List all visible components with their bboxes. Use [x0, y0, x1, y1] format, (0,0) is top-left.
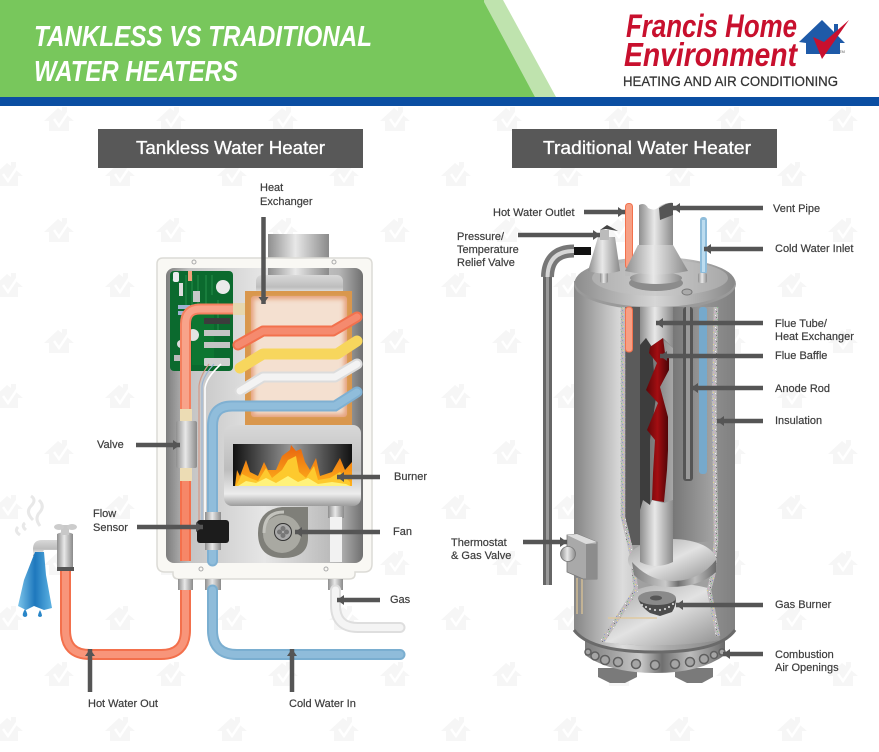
arrow: thermostat	[523, 540, 567, 544]
relief valve	[588, 225, 620, 283]
arrow: cold water in	[290, 649, 294, 692]
pipe: gas out	[336, 590, 400, 628]
side pipe	[543, 247, 591, 585]
label: Pressure/Temperature Relief Valve	[457, 231, 519, 269]
heading: Traditional Water Heater	[512, 129, 777, 168]
label: Gas Burner: Gas Burner	[775, 599, 832, 611]
label: Flue Tube / Heat Exchanger	[775, 318, 854, 343]
flue tube upper	[640, 307, 673, 348]
arrow: flow sensor	[137, 525, 203, 529]
fan	[258, 507, 308, 558]
circuit board	[170, 271, 233, 371]
label: Flow Sensor: Flow	[93, 508, 116, 520]
valve	[176, 409, 197, 481]
title: WATER HEATERS	[34, 56, 239, 88]
label: Flue Tube / Heat Exchanger: Flue Tube/	[775, 318, 828, 330]
pipe: hot water upper	[186, 309, 233, 561]
label: Thermostat & Gas Valve: & Gas Valve	[451, 550, 511, 562]
arrow: cold water inlet	[704, 247, 763, 251]
label: Gas: Gas	[390, 594, 411, 606]
arrow: hot water outlet	[584, 210, 625, 214]
arrow: gas burner	[676, 603, 763, 607]
coil: yellow	[240, 341, 357, 368]
traditional water heater diagram	[543, 203, 736, 683]
flow sensor	[197, 512, 229, 550]
logo: Francis Home Environment: Environment	[624, 36, 799, 73]
label: Pressure/Temperature Relief Valve: Pressure/	[457, 231, 505, 243]
bottom connectors	[178, 579, 343, 590]
logo: Francis Home Environment: TM	[839, 49, 845, 54]
label: Cold Water Inlet: Cold Water Inlet	[775, 243, 853, 255]
logo: Francis Home Environment	[623, 8, 849, 89]
heading: Traditional Water Heater: Traditional Water Heater	[543, 138, 751, 158]
pipe: hot water out	[66, 571, 186, 654]
label: Burner: Burner	[394, 471, 427, 483]
tank body	[574, 257, 736, 652]
arrow: insulation	[717, 419, 763, 423]
arrow: fan	[295, 530, 380, 534]
vent pipe and hood	[625, 203, 688, 291]
tankless water heater diagram	[16, 234, 400, 654]
pipe: cold water upper	[212, 392, 357, 561]
wires	[199, 364, 221, 520]
arrow: relief valve	[518, 233, 600, 237]
label: Flow Sensor	[93, 508, 128, 534]
label: Heat Exchanger: Heat	[260, 182, 283, 194]
label: Flue Baffle: Flue Baffle	[775, 350, 827, 362]
label: Heat Exchanger	[260, 182, 313, 208]
label: Fan: Fan	[393, 526, 412, 538]
coil: red	[238, 317, 357, 345]
thermostat and gas valve	[560, 534, 657, 618]
insulation strips	[602, 307, 718, 642]
label: Valve: Valve	[97, 439, 124, 451]
flue tube lower	[640, 500, 673, 566]
label: Insulation: Insulation	[775, 415, 822, 427]
label: Pressure/Temperature Relief Valve: Temperature	[457, 244, 519, 256]
label: Hot Water Out: Hot Water Out	[88, 698, 158, 710]
connector	[233, 303, 245, 315]
cold water pipe	[698, 217, 707, 474]
flue dark cut	[640, 338, 664, 510]
base ring and feet	[585, 640, 725, 683]
inner shelf	[628, 539, 716, 587]
arrow: flue tube	[656, 321, 763, 325]
case	[157, 258, 372, 579]
label: Combustion Air Openings	[775, 649, 839, 674]
flue baffle	[646, 338, 669, 502]
title: TANKLESS VS TRADITIONAL	[34, 21, 372, 53]
label: Vent Pipe: Vent Pipe	[773, 203, 820, 215]
gas line internal	[328, 506, 344, 562]
label: Combustion Air Openings: Combustion	[775, 649, 834, 661]
flue inner	[650, 340, 673, 505]
faucet with running water	[16, 496, 77, 617]
label: Cold Water In: Cold Water In	[289, 698, 356, 710]
label: Combustion Air Openings: Air Openings	[775, 662, 839, 674]
arrow: vent pipe	[673, 206, 763, 210]
anode rod	[683, 307, 693, 481]
label: Flow Sensor: Sensor	[93, 522, 128, 534]
label: Flue Tube / Heat Exchanger: Heat Exchanger	[775, 331, 854, 343]
pipe: cold water in	[212, 590, 400, 654]
heading: Tankless Water Heater	[98, 129, 363, 168]
chimney	[268, 234, 329, 260]
flames	[235, 445, 352, 486]
arrow: anode rod	[691, 386, 763, 390]
arrow: combustion air	[723, 652, 763, 656]
arrow: hot water out	[88, 649, 92, 692]
heat exchanger	[245, 291, 352, 425]
header banner	[0, 0, 879, 106]
arrow: heat exchanger	[261, 217, 266, 304]
logo: Francis Home Environment: Francis Home	[626, 8, 797, 44]
coil: white	[240, 364, 357, 391]
label: Heat Exchanger: Exchanger	[260, 196, 313, 208]
label: Hot Water Outlet: Hot Water Outlet	[493, 207, 575, 219]
combustion chamber floor	[602, 583, 720, 646]
arrow: flue baffle	[660, 354, 763, 358]
title	[34, 21, 372, 88]
label: Pressure/Temperature Relief Valve: Relief Valve	[457, 257, 515, 269]
arrow: burner	[337, 475, 380, 479]
arrow: gas	[337, 598, 380, 602]
heading: Tankless Water Heater: Tankless Water Heater	[136, 138, 325, 158]
label: Anode Rod: Anode Rod	[775, 383, 830, 395]
label: Thermostat & Gas Valve: Thermostat	[451, 537, 507, 549]
gas burner	[638, 591, 676, 616]
label: Thermostat & Gas Valve	[451, 537, 511, 562]
logo: Francis Home Environment: HEATING AND AIR CONDITIONING	[623, 73, 838, 89]
burner housing	[224, 425, 361, 506]
arrow: valve	[136, 443, 180, 447]
hot water pipe	[626, 204, 632, 352]
cutaway interior	[602, 307, 720, 646]
